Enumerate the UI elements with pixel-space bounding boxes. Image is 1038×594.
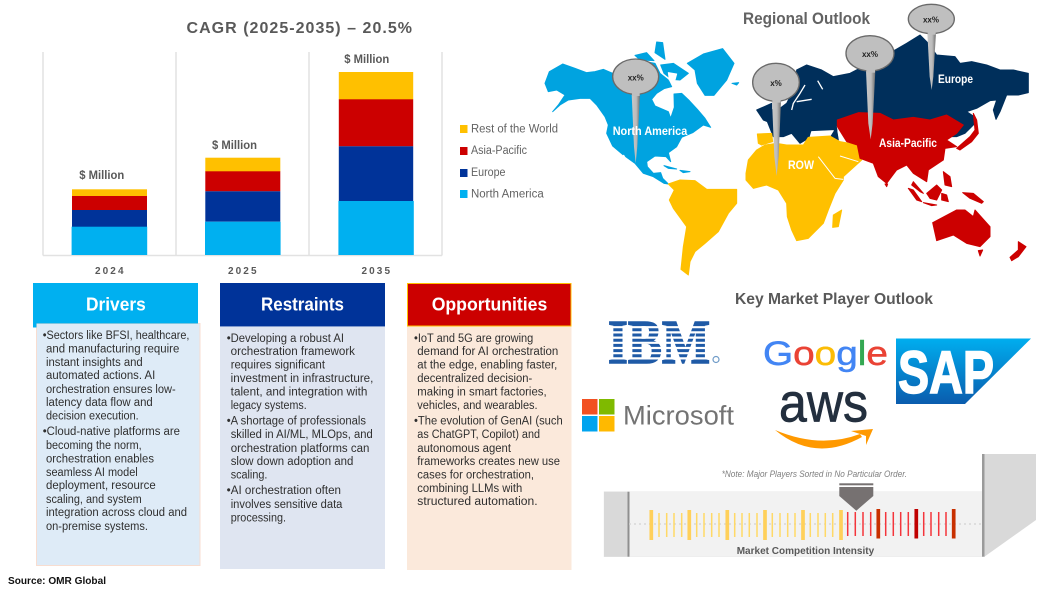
opportunities body: frameworks creates new use [417,456,560,468]
bar value labels: $ Million [212,138,257,152]
map: South America [668,180,737,275]
chart legend [460,124,558,200]
opportunities body: demand for AI orchestration [417,346,558,358]
map labels: North America [613,126,688,138]
opportunities body: structured automation. [417,496,538,508]
opportunities body: combining LLMs with [417,483,522,495]
restraints body: •Developing a robust AI [227,333,344,345]
map: Asia-Pacific [837,113,1026,261]
restraints body: requires significant [231,360,326,372]
world map [545,4,1028,275]
restraints body: •AI orchestration often [227,485,341,497]
chart legend: Asia-Pacific [471,145,527,157]
pin: Asia-Pacific [846,36,894,139]
drivers body: scaling, and system [46,494,142,506]
drivers header: Drivers [86,294,146,314]
gauge label: Market Competition Intensity [737,545,874,557]
panel: restraints [220,283,385,569]
key market player heading: Key Market Player Outlook [735,291,933,308]
map labels: Asia-Pacific [879,138,938,150]
year axis labels: 2035 [362,266,390,277]
drivers body: decision execution. [46,410,139,422]
logo: Google: Google [763,335,888,373]
gauge pointer [839,483,873,511]
drivers body: deployment, resource [46,480,156,492]
drivers body: becoming the norm, [46,440,142,452]
restraints body: scaling. [231,470,267,482]
panel: opportunities [407,284,572,570]
note: player order: *Note: Major Players Sorted in No Particular Order. [722,469,907,480]
restraints body: processing. [231,512,286,524]
logo: AWS: aws [779,372,868,434]
year axis labels: 2024 [95,266,124,277]
opportunities body: at the edge, enabling faster, [417,360,557,372]
market competition intensity gauge [604,454,1036,557]
drivers body: on-premise systems. [46,521,148,533]
restraints body: involves sensitive data [231,499,343,511]
drivers body: automated actions. AI [46,370,155,382]
restraints body [220,327,385,569]
drivers body: orchestration ensures low- [46,384,176,396]
opportunities body: decentralized decision- [417,373,532,385]
drivers body: seamless AI model [46,467,138,479]
drivers header [33,283,198,328]
drivers body: and manufacturing require [46,344,179,356]
year axis labels [95,266,390,277]
drivers body: •Cloud-native platforms are [43,426,180,438]
opportunities body: vehicles, and wearables. [417,400,538,412]
opportunities header: Opportunities [432,294,547,314]
map labels [613,16,973,172]
stacked bar chart [43,52,442,277]
map: North America [545,42,739,184]
restraints body: talent, and integration with [231,386,367,398]
restraints body: orchestration framework [231,346,355,358]
map labels: Europe [938,74,973,86]
regional outlook heading: Regional Outlook [743,10,871,28]
restraints body: orchestration platforms can [231,443,369,455]
opportunities body: as ChatGPT, Copilot) and [417,429,540,441]
map labels: x% [770,79,782,88]
logo: Microsoft [582,399,734,432]
bar 2024 [72,189,147,255]
chart title: CAGR (2025-2035) – 20.5% [186,20,412,37]
bar 2025 [205,158,281,255]
gauge ticks [651,509,954,540]
logo: Microsoft: Microsoft [623,400,734,430]
restraints body: legacy systems. [231,400,307,412]
drivers body: •Sectors like BFSI, healthcare, [43,330,189,342]
chart legend: North America [471,188,544,200]
map labels: xx% [923,16,939,24]
pin: Rest of World [753,63,799,176]
bar value labels: $ Million [79,168,124,182]
logo: SAP: SAP [898,339,994,406]
bar 2035 [338,72,414,255]
restraints body: •A shortage of professionals [227,416,366,428]
drivers body: orchestration enables [46,454,154,466]
drivers body: instant insights and [46,357,143,369]
restraints header: Restraints [261,294,344,314]
restraints header [220,283,385,326]
bar value labels: $ Million [344,52,389,66]
opportunities body: making in smart factories, [417,386,547,398]
restraints body: skilled in AI/ML, MLOps, and [231,429,373,441]
year axis labels: 2025 [228,266,257,277]
bar value labels [79,52,389,182]
logo: IBM: IBM [608,309,710,377]
opportunities body: •The evolution of GenAI (such [414,416,563,428]
chart legend: Rest of the World [471,124,558,136]
map: Europe and Russia [757,35,1028,143]
source note: Source: OMR Global [8,575,106,587]
drivers body: integration across cloud and [46,507,187,519]
opportunities body: cases for orchestration, [417,470,534,482]
pin: Europe [908,4,954,90]
map labels: ROW [788,160,814,172]
opportunities body [407,326,572,570]
opportunities body: autonomous agent [417,443,512,455]
chart legend: Europe [471,167,506,179]
pin: North America [613,59,659,163]
map labels: xx% [628,74,644,82]
opportunities header [408,284,571,326]
drivers body: latency data flow and [46,397,153,409]
restraints body: investment in infrastructure, [231,373,373,385]
drivers body [36,324,200,566]
map labels: xx% [862,50,878,59]
restraints body: slow down adoption and [231,456,353,468]
opportunities body: •IoT and 5G are growing [414,333,533,345]
map: Africa and Middle East [746,133,862,241]
panel: drivers [33,283,200,566]
